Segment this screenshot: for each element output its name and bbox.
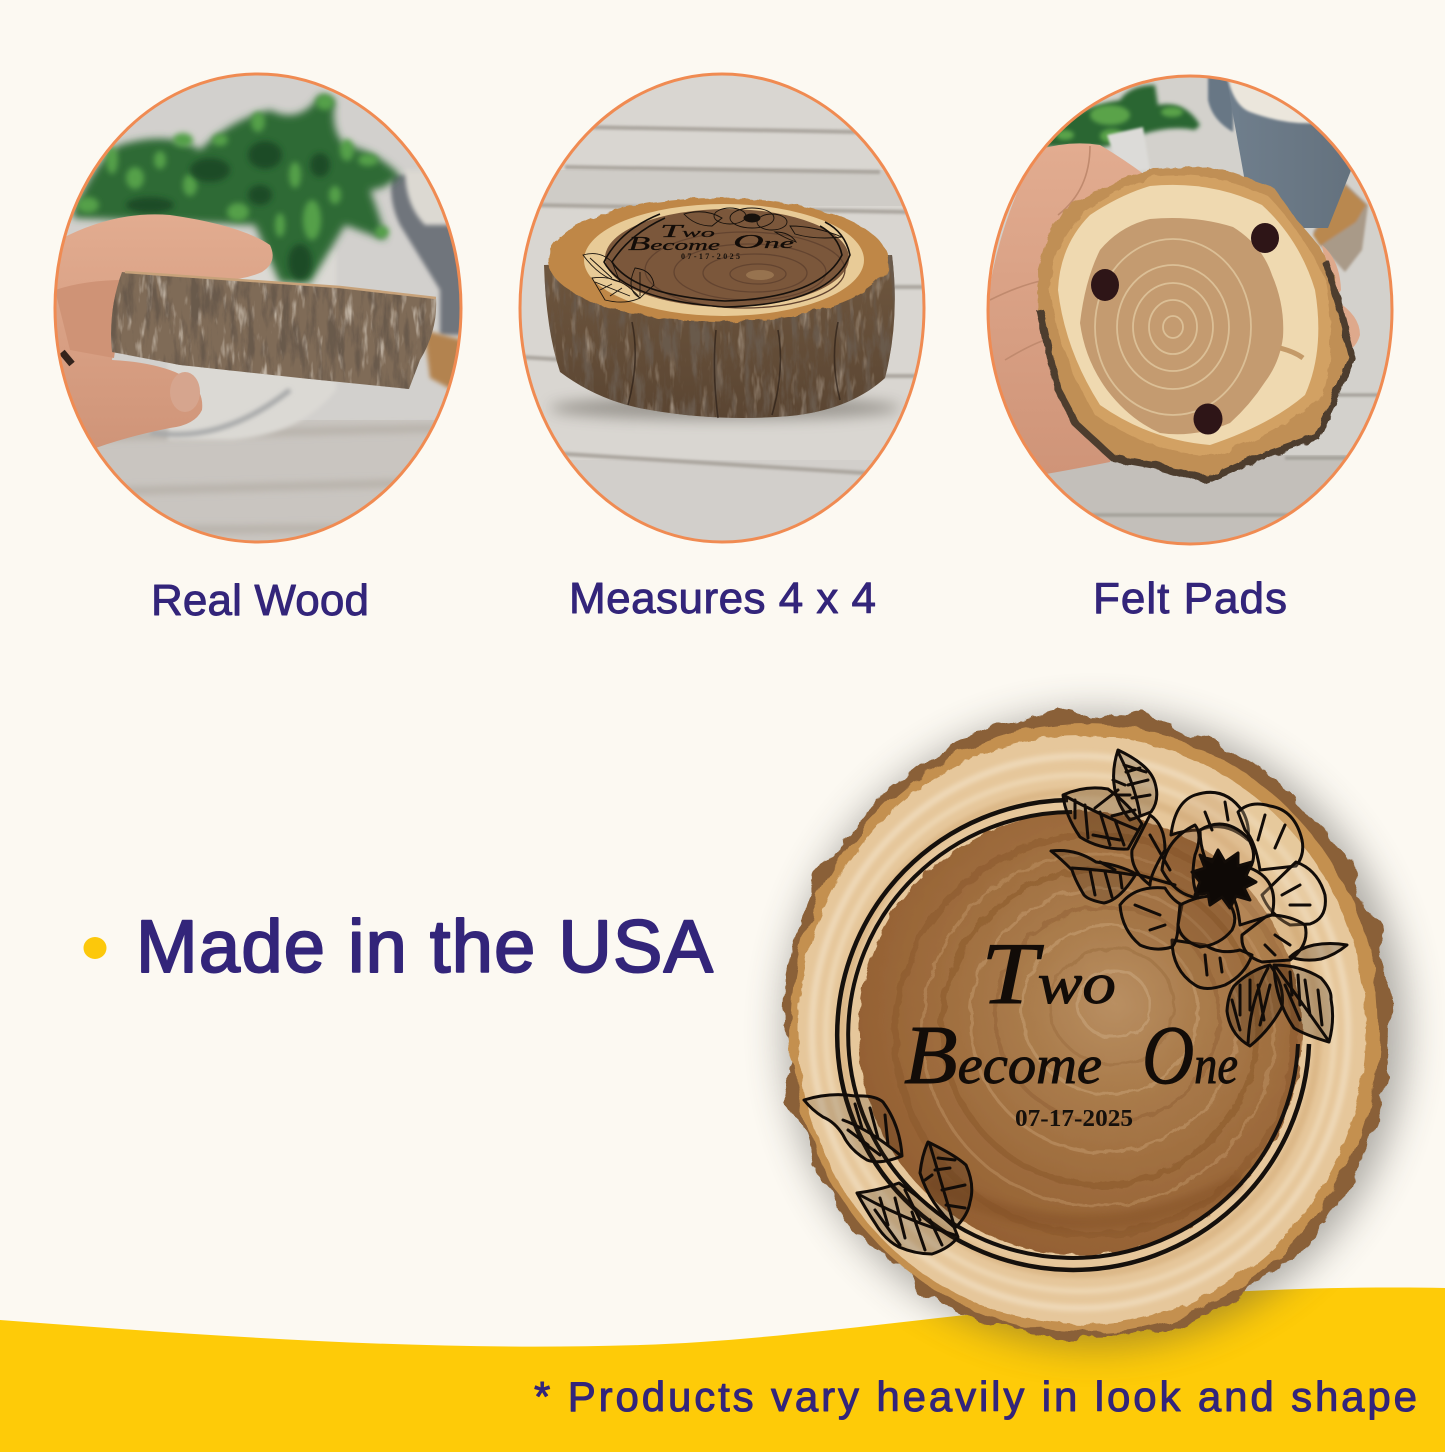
flower engraving: [804, 750, 1347, 1254]
top face: [548, 198, 888, 322]
coaster shadow: [785, 714, 1405, 1346]
small flower engraving: [583, 208, 842, 302]
leaf thin: [1290, 944, 1347, 960]
heartwood: [858, 811, 1302, 1255]
engraved text: date: 07-17-2025: [1015, 1106, 1133, 1132]
engraved text: One: One: [1142, 1009, 1238, 1102]
small engraved text: T wo: [660, 221, 716, 241]
small engraved ring: [604, 214, 850, 307]
hand: [985, 143, 1360, 475]
caption: felt pads: Felt Pads: [1093, 574, 1287, 623]
leaf lower right a: [1227, 965, 1282, 1046]
panel: measures photo: 07-17-2025: [681, 252, 740, 261]
planter: [1107, 127, 1150, 172]
sapwood: [791, 724, 1379, 1332]
plant: [72, 94, 400, 283]
mug: [1206, 78, 1351, 228]
leaf lower right b: [1274, 965, 1333, 1042]
flower centre: [1192, 850, 1256, 908]
blurred plant: [1040, 85, 1200, 147]
yellow wave band: [0, 1288, 1445, 1452]
leaf third: [1051, 850, 1136, 903]
bark slice side: [111, 272, 436, 389]
petal creases: [1135, 802, 1310, 975]
engraved text: Become: Become: [904, 1009, 1102, 1102]
panel: measures photo: B ecome: [628, 233, 721, 255]
heading: made in the USA: Made in the USA: [136, 905, 714, 988]
stem: [1136, 835, 1175, 885]
caption: real wood: Real Wood: [151, 576, 369, 625]
lower left leaf 3: [857, 1183, 958, 1254]
felt pads: [1091, 223, 1279, 434]
footnote: * Products vary heavily in look and shape: [534, 1373, 1417, 1420]
contact shadow: [550, 396, 900, 420]
panel: real wood photo: [50, 70, 465, 550]
panel: felt pads photo: [985, 70, 1400, 550]
bark side: [544, 255, 895, 418]
blurred mug: [391, 175, 465, 335]
hand holding slice: [50, 214, 273, 452]
caption: measures: Measures 4 x 4: [569, 574, 876, 623]
white basket: [168, 250, 336, 440]
leaf top: [1114, 750, 1157, 820]
lower left leaf 1: [804, 1095, 902, 1162]
wood slice back: [1037, 167, 1352, 483]
bullet dot: [84, 937, 106, 959]
petals: [1171, 792, 1248, 840]
bark edge: [784, 712, 1390, 1340]
engraved text: Two: Two: [981, 926, 1116, 1023]
panel: measures photo: [515, 70, 930, 550]
lower left leaf 2: [920, 1142, 972, 1227]
leaf second: [1063, 788, 1142, 849]
engraved double ring: [837, 800, 1309, 1270]
panel: measures photo: O ne: [733, 231, 795, 253]
main coaster: [784, 712, 1390, 1340]
tan coaster under mug: [1313, 183, 1368, 272]
